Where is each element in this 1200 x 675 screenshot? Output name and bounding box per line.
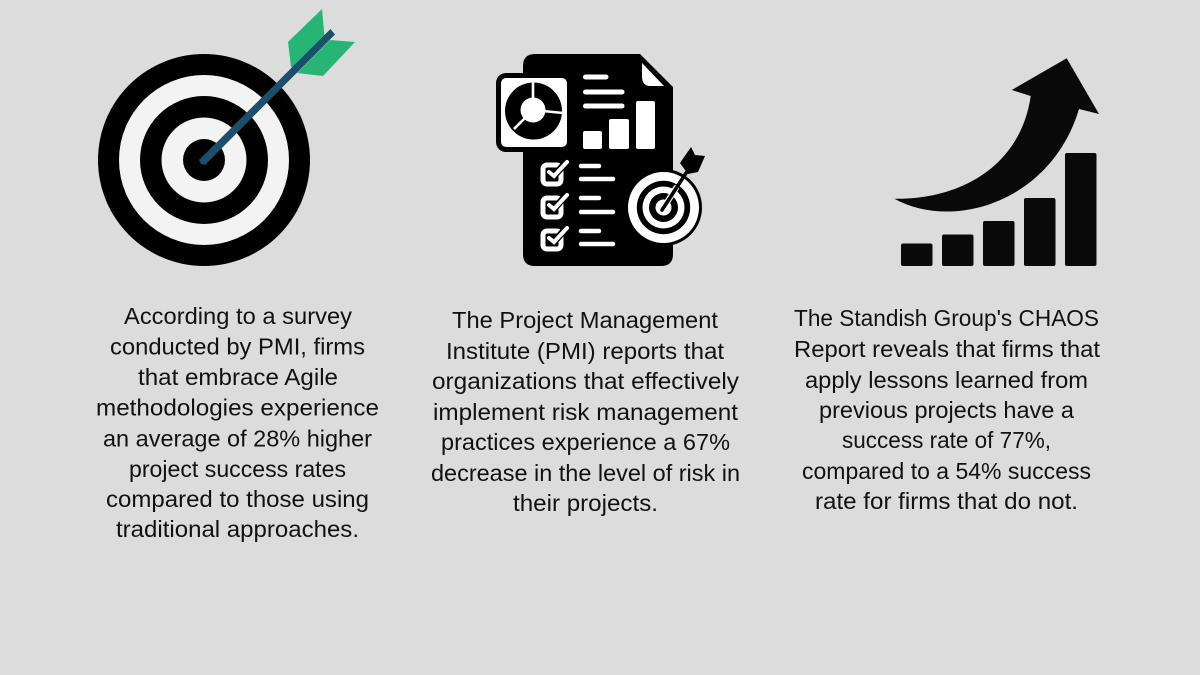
text block: lessons learned statistic: Report reveals that firms that [794,336,1101,362]
arrow shaft [199,29,335,165]
small target with arrow [625,147,705,246]
text block: lessons learned statistic [794,305,1101,514]
text block: risk management statistic [431,307,740,516]
target rings [98,54,310,266]
text block: lessons learned statistic: apply lessons learned from [805,367,1088,393]
text block: Agile methodologies statistic: According to a survey [124,303,353,329]
text block: risk management statistic: Institute (PMI) reports that [446,338,725,364]
text block: risk management statistic: organizations that effectively [432,368,740,394]
arrow fletching [288,9,355,76]
text block: Agile methodologies statistic: an average of 28% higher [103,426,372,452]
checklist [543,160,613,249]
text block: risk management statistic: decrease in the level of risk in [431,460,740,486]
text block: Agile methodologies statistic: conducted by PMI, firms [110,334,365,360]
pie chart card [496,73,572,152]
curved arrow [894,58,1099,212]
text block: lessons learned statistic: previous projects have a [819,397,1074,423]
bar chart [583,101,655,149]
text block: Agile methodologies statistic [96,303,379,542]
text block: lessons learned statistic: success rate of 77%, [842,427,1051,453]
text lines [586,77,622,106]
text block: lessons learned statistic: compared to a 54% success [802,458,1091,484]
text block: risk management statistic: The Project Management [452,307,719,333]
folded corner [642,63,664,86]
text block: Agile methodologies statistic: methodologies experience [96,394,379,420]
text block: risk management statistic: their projects. [513,490,658,516]
document body [523,54,673,266]
text block: risk management statistic: implement risk management [433,399,739,425]
text block: lessons learned statistic: rate for firms that do not. [815,488,1078,514]
icon: project report document with target [496,54,705,266]
text block: lessons learned statistic: The Standish Group's CHAOS [794,305,1099,331]
text block: Agile methodologies statistic: that embrace Agile [138,364,338,390]
icon: target with green-fletched arrow [98,9,355,266]
text block: risk management statistic: practices experience a 67% [441,429,730,455]
icon: rising arrow over bar chart [894,58,1099,266]
text block: Agile methodologies statistic: traditional approaches. [116,516,359,542]
text block: Agile methodologies statistic: project success rates [129,456,346,482]
text block: Agile methodologies statistic: compared to those using [106,486,369,512]
growth bars [901,153,1096,266]
